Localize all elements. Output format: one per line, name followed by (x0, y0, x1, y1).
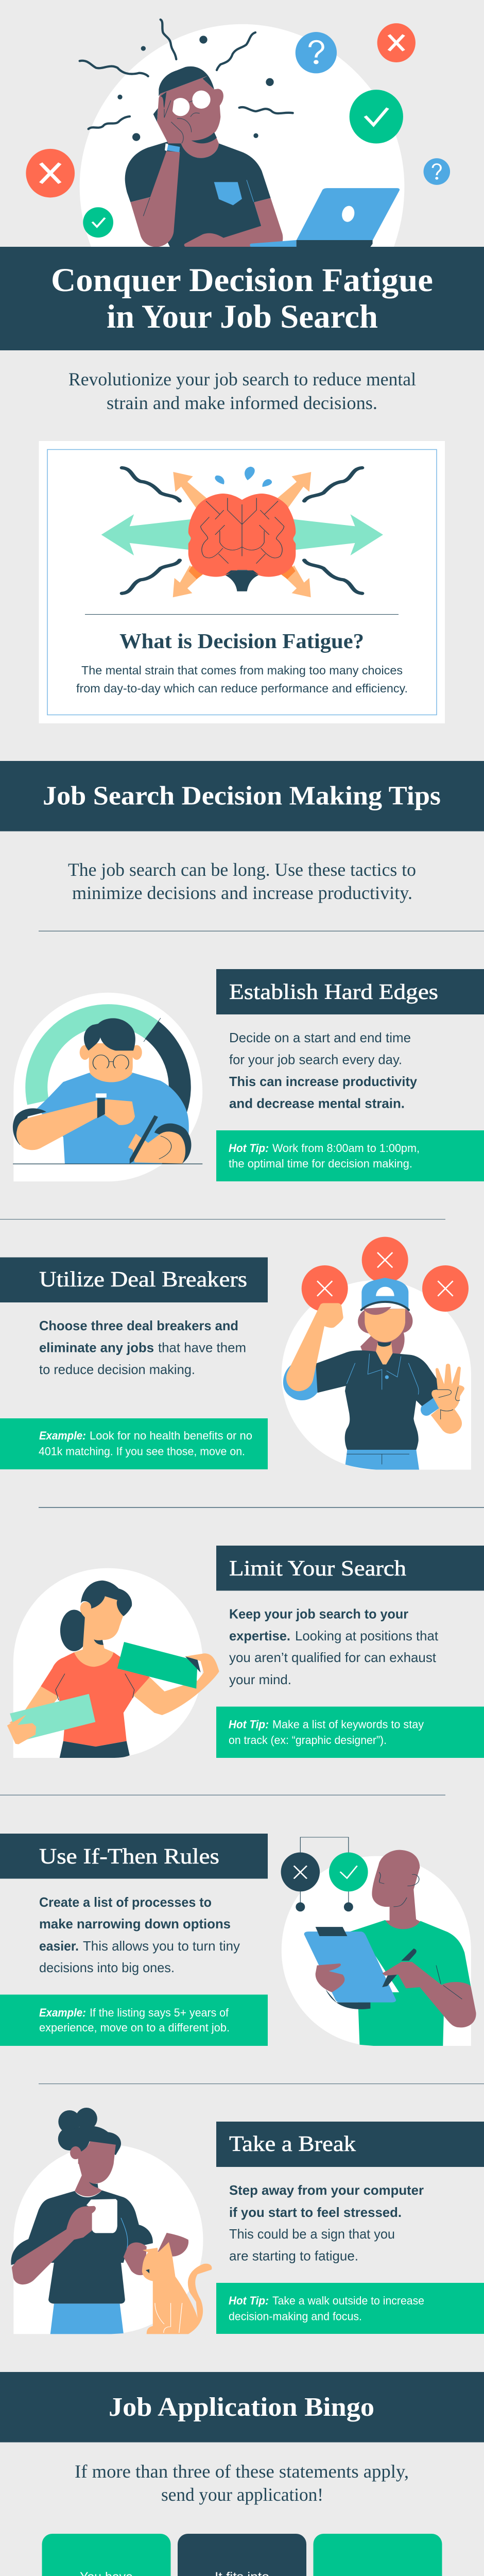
intro text (68, 369, 416, 413)
tip 3 body text: Looking at positions that (295, 1628, 439, 1643)
icon: left red cross (26, 149, 75, 197)
panel description (76, 664, 408, 695)
clipboard (304, 1927, 396, 2003)
tip 2 example box: Look for no health benefits or no (90, 1429, 252, 1442)
decision connector (300, 1837, 349, 1907)
tip 4 body text: Create a list of processes to (39, 1894, 212, 1910)
panel description: The mental strain that comes from making too many choices (81, 664, 403, 677)
tip 3 hot tip box: Hot Tip: (229, 1718, 269, 1731)
brain folds (201, 498, 284, 564)
bingo card: career plans (178, 2534, 306, 2576)
mint horizontal arrows (101, 514, 383, 555)
white blob (282, 1280, 471, 1470)
pen and writing hand (382, 1948, 476, 2027)
white blob (13, 2145, 203, 2334)
tip 3 hot tip box: Make a list of keywords to stay (272, 1718, 424, 1731)
person hair (58, 2108, 121, 2155)
tip 4 example box (0, 1995, 268, 2046)
tips intro text: minimize decisions and increase productivity. (72, 883, 412, 903)
tip 3 illustration: woman with papers (7, 1568, 219, 1758)
tip 2 heading band (0, 1257, 268, 1302)
tip 3 body text: you aren’t qualified for can exhaust (229, 1650, 437, 1665)
tip 2 body text: that have them (158, 1340, 246, 1355)
tip 4 illustration: man with clipboard (281, 1837, 476, 2046)
tip 4 body text: easier. (39, 1938, 79, 1954)
brain illustration with arrows (101, 467, 383, 597)
title band (0, 247, 484, 350)
bingo intro text: If more than three of these statements apply, (75, 2461, 409, 2482)
sweat drops (215, 467, 272, 487)
tip 2 body text (39, 1318, 246, 1377)
tip 5 illustration: person with mug and cat (11, 2108, 212, 2334)
brain (188, 494, 296, 577)
tip 4 heading band: Use If-Then Rules (39, 1845, 219, 1869)
section band: job application bingo: Job Application Bingo (109, 2393, 374, 2422)
tip 3 hot tip box: on track (ex: “graphic designer”). (229, 1734, 387, 1747)
icon: top red cross (377, 23, 416, 62)
tip 5 body text: if you start to feel stressed. (229, 2205, 402, 2220)
white blob (13, 993, 202, 1181)
tip 5 heading band (216, 2122, 484, 2167)
tip 4 heading band (0, 1834, 268, 1878)
white blob (13, 1568, 203, 1758)
man body and arms (13, 1068, 202, 1164)
tip 3 heading band (216, 1546, 484, 1591)
tip 1 illustration: man checking watch (13, 993, 202, 1181)
white blob (282, 1856, 471, 2046)
section band: job search decision making tips: Job Search Decision Making Tips (43, 781, 441, 811)
man head (80, 1018, 142, 1084)
tip 5 body text: This could be a sign that you (229, 2226, 395, 2242)
bingo intro text (75, 2461, 409, 2505)
tip 1 heading band (216, 969, 484, 1014)
tip 1 hot tip box (216, 1130, 484, 1181)
tip 4 example box: Example: (39, 2006, 86, 2019)
laptop (297, 188, 400, 247)
hero white backdrop (80, 24, 404, 247)
tip 1 body text: Decide on a start and end time (229, 1030, 411, 1045)
tip 3 body text: Keep your job search to your (229, 1606, 408, 1622)
tip 2 body text: to reduce decision making. (39, 1362, 195, 1377)
person body, mug and cat (11, 2164, 212, 2334)
bingo card: job requirements (42, 2534, 171, 2576)
bingo card: commute (313, 2534, 442, 2576)
tip 2 example box (0, 1418, 268, 1469)
tip 2 body text: eliminate any jobs (39, 1340, 154, 1355)
tip 5 body text: Step away from your computer (229, 2182, 424, 2198)
icon: large green check (350, 90, 403, 144)
tip 3 body text (229, 1606, 439, 1687)
tip 3 body text: your mind. (229, 1672, 291, 1687)
panel: what is decision fatigue (39, 441, 445, 723)
tip 2 illustration: woman holding up three fingers (282, 1237, 471, 1470)
dark squiggles (122, 468, 362, 594)
stress squiggles (80, 20, 293, 129)
icon: three red crosses (302, 1237, 469, 1312)
man figure (125, 66, 296, 247)
tip 5 hot tip box: decision-making and focus. (229, 2310, 362, 2323)
person head (70, 2141, 116, 2164)
icon: small green check (83, 207, 113, 238)
tip 5 heading band: Take a Break (229, 2132, 356, 2156)
tip 2 example box: 401k matching. If you see those, move on. (39, 1445, 245, 1458)
hero illustration: stressed man at laptop (26, 20, 450, 247)
tip 2 example box: Example: (39, 1429, 86, 1442)
tip 5 hot tip box (216, 2283, 484, 2334)
tip 4 body text (39, 1894, 240, 1975)
brain stem (224, 570, 260, 591)
bingo intro text: send your application! (161, 2484, 323, 2505)
peach diagonal arrows (173, 472, 311, 597)
title line one: Conquer Decision Fatigue (51, 262, 433, 299)
icon: small question bubble (424, 158, 450, 185)
tip 5 hot tip box: Take a walk outside to increase (272, 2294, 424, 2307)
tip 3 heading band: Limit Your Search (229, 1557, 406, 1581)
title line two: in Your Job Search (107, 298, 378, 335)
clock ring (37, 1015, 180, 1111)
tip 2 heading band: Utilize Deal Breakers (39, 1268, 247, 1292)
tips intro text (68, 859, 416, 903)
section band: job search decision making tips (0, 761, 484, 832)
intro text: strain and make informed decisions. (107, 393, 377, 413)
tip 1 heading band: Establish Hard Edges (229, 980, 438, 1004)
intro text: Revolutionize your job search to reduce mental (68, 369, 416, 389)
tip 3 body text: expertise. (229, 1628, 290, 1643)
tip 4 body text: This allows you to turn tiny (83, 1938, 240, 1954)
tip 5 hot tip box: Hot Tip: (229, 2294, 269, 2307)
green paper (117, 1642, 201, 1689)
tip 1 body text (229, 1030, 418, 1111)
tip 4 body text: decisions into big ones. (39, 1960, 175, 1975)
mint paper with hand (7, 1694, 95, 1744)
icon: large question bubble (296, 32, 337, 73)
panel description: from day-to-day which can reduce performance and efficiency. (76, 682, 408, 695)
panel heading: What is Decision Fatigue? (119, 629, 364, 653)
tips intro text: The job search can be long. Use these tactics to (68, 859, 416, 880)
man figure (325, 1850, 471, 2046)
tip 4 example box: experience, move on to a different job. (39, 2021, 230, 2034)
icon: green check node (329, 1853, 368, 1911)
tip 5 body text (229, 2182, 424, 2264)
woman figure (9, 1581, 219, 1758)
icon: dark cross node (281, 1853, 320, 1911)
tip 1 hot tip box: Hot Tip: (229, 1142, 269, 1155)
tip 1 hot tip box: the optimal time for decision making. (229, 1157, 412, 1170)
tip 1 body text: and decrease mental strain. (229, 1095, 405, 1111)
section band: job application bingo (0, 2372, 484, 2442)
tip 3 hot tip box (216, 1706, 484, 1758)
woman figure (283, 1278, 464, 1470)
tip 4 example box: If the listing says 5+ years of (90, 2006, 229, 2019)
tip 5 body text: are starting to fatigue. (229, 2248, 358, 2264)
tip 2 body text: Choose three deal breakers and (39, 1318, 238, 1333)
tip 1 hot tip box: Work from 8:00am to 1:00pm, (272, 1142, 420, 1155)
tip 4 body text: make narrowing down options (39, 1916, 231, 1931)
stress dots (117, 36, 274, 141)
tip 1 body text: for your job search every day. (229, 1052, 402, 1067)
tip 1 body text: This can increase productivity (229, 1074, 418, 1089)
